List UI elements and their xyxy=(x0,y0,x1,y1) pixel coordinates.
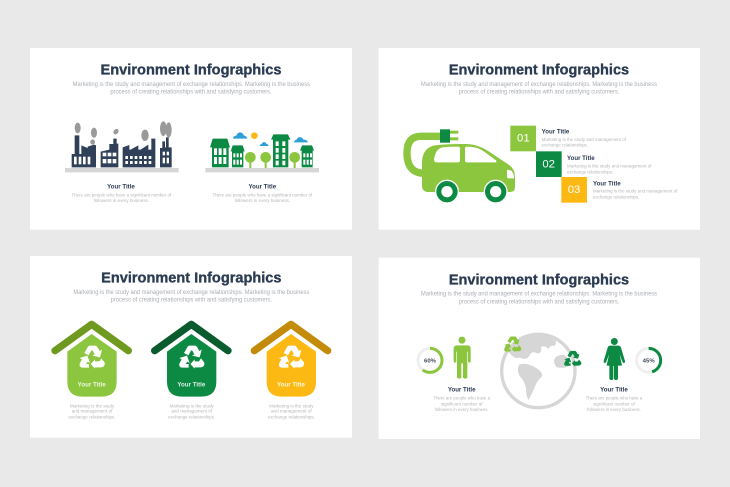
heading: Environment Infographics xyxy=(100,62,281,79)
intro text xyxy=(73,289,309,304)
text block: left: There are people who have a xyxy=(433,396,490,402)
intro text: process of creating relationships with and satisfying customers. xyxy=(110,89,272,96)
house: dark green: exchange relationships. xyxy=(168,415,215,421)
intro text xyxy=(421,81,657,96)
intro text: process of creating relationships with and satisfying customers. xyxy=(111,297,272,304)
icon: woman xyxy=(604,338,625,380)
chart: 45% donut xyxy=(637,348,661,372)
text block: factories xyxy=(71,183,172,204)
intro text xyxy=(73,81,310,96)
house: dark green: Your Title xyxy=(177,381,206,388)
step 03: Marketing is the study and management of xyxy=(593,189,678,195)
text block: right: significant number of xyxy=(593,401,635,407)
icon: man xyxy=(454,337,471,379)
text block: city: followers in every business. xyxy=(235,198,290,204)
text block: left xyxy=(433,387,490,413)
text block: right: There are people who have a xyxy=(586,396,643,402)
text block: factories: Your Title xyxy=(107,183,135,190)
icon: recycle dark green xyxy=(564,351,581,366)
house: light green: Your Title xyxy=(78,381,106,388)
house: light green: Marketing is the study xyxy=(70,403,115,409)
text block: right: Your Title xyxy=(600,387,628,394)
step 03 xyxy=(561,177,678,203)
icon: factories xyxy=(65,121,179,172)
house: yellow: and management of xyxy=(271,409,312,415)
intro text: Marketing is the study and management of exchange relationships. Marketing is the business xyxy=(421,81,657,88)
step 02: 02 xyxy=(542,158,555,170)
step 02 xyxy=(536,151,652,177)
house: dark green xyxy=(155,324,228,421)
text block: city xyxy=(212,183,313,204)
intro text: process of creating relationships with and satisfying customers. xyxy=(459,89,620,96)
step 02: Marketing is the study and management of xyxy=(567,164,652,170)
icon: recycle light green xyxy=(504,337,521,352)
step 01: 01 xyxy=(517,133,530,145)
step 03: Your Title xyxy=(593,180,621,187)
step 03: 03 xyxy=(568,184,580,196)
text block: city: Your Title xyxy=(248,183,277,190)
house: yellow: Marketing is the study xyxy=(269,403,314,409)
panel: recycling houses xyxy=(30,256,352,438)
icon: green city xyxy=(205,132,319,172)
step 01 xyxy=(510,126,627,151)
step 01: exchange relationships. xyxy=(542,143,588,149)
text block: right xyxy=(586,387,643,413)
step 02: Your Title xyxy=(567,155,595,162)
house: dark green: Marketing is the study xyxy=(169,403,214,409)
heading: Environment Infographics xyxy=(101,270,281,287)
step 03: exchange relationships. xyxy=(593,195,639,201)
panel: globe and people xyxy=(379,258,700,439)
panel: factories and city xyxy=(30,48,352,230)
intro text: Marketing is the study and management of exchange relationships. Marketing is the business xyxy=(73,289,309,296)
step 01: Marketing is the study and management of xyxy=(542,137,627,143)
text block: right: followers in every business. xyxy=(587,407,641,413)
intro text: Marketing is the study and management of exchange relationships. Marketing is the business xyxy=(421,291,657,298)
text block: left: Your Title xyxy=(448,387,476,394)
house: light green: and management of xyxy=(72,409,113,415)
chart: 60% donut xyxy=(418,348,442,372)
heading: Environment Infographics xyxy=(449,62,629,79)
step 01: Your Title xyxy=(542,129,570,136)
step 02: exchange relationships. xyxy=(567,169,613,175)
intro text: process of creating relationships with and satisfying customers. xyxy=(459,298,620,305)
house: dark green: and management of xyxy=(171,409,213,415)
intro text: Marketing is the study and management of exchange relationships. Marketing is the business xyxy=(73,81,310,88)
text block: city: There are people who have a significant number of xyxy=(212,192,313,198)
house: light green xyxy=(55,324,128,421)
house: light green: exchange relationships. xyxy=(68,415,115,421)
chart: 45% donut: 45% xyxy=(643,358,655,364)
house: yellow: Your Title xyxy=(277,381,305,388)
house: yellow: exchange relationships. xyxy=(268,415,315,421)
icon: electric car xyxy=(407,129,515,203)
text block: left: significant number of xyxy=(441,401,483,407)
panel: electric car xyxy=(379,48,700,230)
icon: globe xyxy=(502,334,575,408)
house: yellow xyxy=(254,324,328,421)
chart: 60% donut: 60% xyxy=(424,358,436,364)
text block: factories: There are people who have a significant number of xyxy=(71,192,172,198)
text block: left: followers in every business. xyxy=(435,407,489,413)
heading: Environment Infographics xyxy=(449,271,629,288)
intro text xyxy=(421,291,657,305)
text block: factories: followers in every business. xyxy=(94,198,149,204)
